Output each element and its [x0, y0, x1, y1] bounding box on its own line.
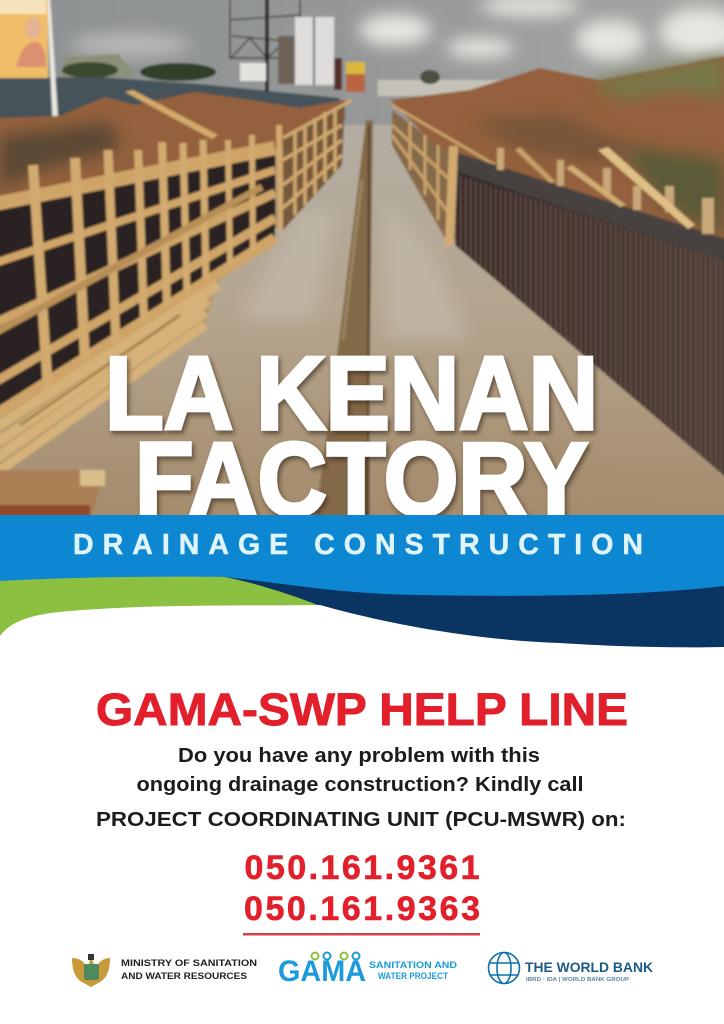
logo: GAMA project	[278, 952, 457, 988]
title: La Kenan Factory: LA KENAN	[105, 336, 598, 452]
icon: ghana coat of arms	[72, 954, 110, 987]
dark boundary fence	[0, 77, 340, 118]
project name: WATER PROJECT	[378, 971, 448, 982]
concrete floor	[70, 124, 724, 515]
billboards	[230, 0, 365, 92]
left formwork panel near	[0, 125, 281, 415]
title: La Kenan Factory: FACTORY	[135, 422, 588, 538]
photo base fill	[215, 129, 459, 284]
billboard with portrait and pole	[0, 0, 59, 132]
helpline instructions	[96, 745, 626, 831]
lumber pallet	[0, 470, 105, 521]
ministry name: MINISTRY OF SANITATION	[121, 958, 257, 968]
panel: construction site photo	[0, 0, 724, 521]
red rule	[243, 933, 480, 936]
banner subtitle: DRAINAGE CONSTRUCTION	[73, 529, 643, 561]
phone numbers: 050.161.9361	[244, 849, 480, 887]
navy wave	[225, 577, 724, 660]
right formwork panel	[392, 105, 495, 246]
stacked lumber	[0, 285, 218, 478]
world bank tagline: IBRD · IDA | WORLD BANK GROUP	[526, 977, 629, 983]
world bank name: THE WORLD BANK	[525, 959, 653, 975]
logo: ministry of sanitation	[72, 954, 257, 987]
right rebar wall	[455, 153, 724, 480]
left formwork panel far	[283, 100, 352, 230]
helpline instructions: Do you have any problem with this	[178, 745, 540, 767]
helpline instructions: ongoing drainage construction? Kindly call	[136, 774, 584, 796]
left soil mounds	[0, 88, 346, 197]
green wave	[0, 577, 330, 660]
ministry name	[121, 958, 257, 981]
white lower panel	[0, 605, 724, 1024]
icon: globe	[488, 952, 520, 984]
sky with clouds	[0, 0, 724, 130]
project name	[369, 960, 457, 982]
right soil mounds	[390, 55, 724, 250]
helpline instructions: PROJECT COORDINATING UNIT (PCU-MSWR) on:	[96, 809, 626, 831]
ministry name: AND WATER RESOURCES	[121, 971, 247, 981]
blue banner	[0, 515, 724, 600]
logo: world bank	[488, 952, 653, 984]
right wall posts and planks	[497, 147, 714, 234]
phone numbers	[244, 849, 480, 928]
title: La Kenan Factory	[108, 356, 598, 515]
GAMA wordmark: GAMA	[278, 955, 366, 988]
phone numbers: 050.161.9363	[244, 890, 480, 928]
helpline heading: GAMA-SWP HELP LINE	[96, 684, 628, 735]
project name: SANITATION AND	[369, 960, 457, 971]
floor stains	[246, 214, 466, 342]
distant trees and building	[60, 54, 503, 96]
icon: people heads	[312, 952, 360, 960]
central gutter	[315, 120, 373, 521]
